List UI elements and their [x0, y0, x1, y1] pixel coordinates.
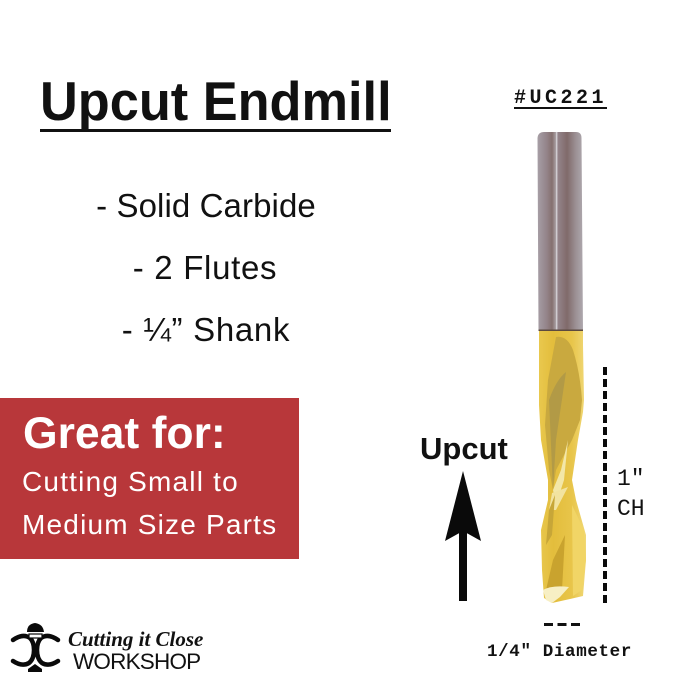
diameter label: 1/4" Diameter — [487, 642, 632, 662]
logo mark — [10, 623, 60, 672]
logo script text: Cutting it Close — [68, 627, 203, 651]
title: Upcut Endmill — [40, 70, 392, 132]
upcut arrow — [445, 471, 481, 601]
feature: flutes: - 2 Flutes — [133, 249, 277, 286]
logo — [10, 623, 203, 674]
diameter tick — [544, 623, 580, 626]
upcut label: Upcut — [420, 431, 508, 466]
panel: great for — [0, 398, 299, 559]
flutes — [538, 330, 586, 603]
panel heading: Great for: — [23, 409, 226, 458]
cutting height label: 1" CH — [617, 466, 645, 522]
cutting height dotted line — [603, 367, 607, 603]
shank — [538, 132, 583, 331]
feature: solid carbide: - Solid Carbide — [96, 187, 316, 224]
feature: shank: - ¼” Shank — [122, 311, 290, 348]
logo workshop text: WORKSHOP — [73, 649, 200, 674]
panel text line 2: Medium Size Parts — [22, 509, 277, 540]
panel text line 1: Cutting Small to — [22, 466, 239, 497]
part number: #UC221 — [514, 87, 607, 110]
